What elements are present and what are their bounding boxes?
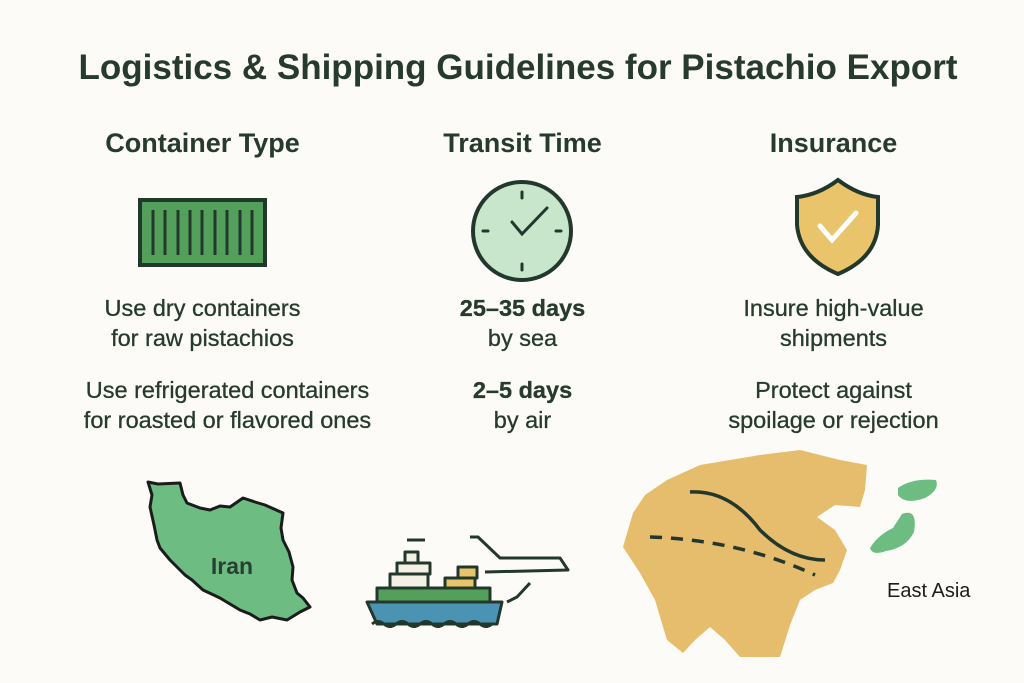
text: dry containers: for raw pistachios [111,325,294,351]
icon: shield [797,180,878,274]
text: sea: by sea [488,325,557,351]
text: spoilage [728,377,939,434]
text: high-value: Insure high-value [743,295,924,321]
heading: transit time: Transit Time [443,128,602,158]
icon: clock [473,182,571,280]
icon: ship and plane [367,537,568,626]
title: Logistics & Shipping Guidelines for Pistachio Export [78,48,957,87]
text: sea [460,295,585,352]
map: Iran: Iran [211,553,253,579]
map: East Asia with routes [623,450,971,657]
text: high-value [743,295,924,352]
map: Iran [148,482,310,620]
map: East Asia with routes: East Asia [887,580,971,602]
heading: insurance: Insurance [770,128,897,158]
heading: container type: Container Type [105,128,300,158]
text: spoilage: Protect against [755,377,912,403]
text: dry containers [105,295,300,352]
text: dry containers: Use dry containers [105,295,300,321]
text: refrigerated containers [84,377,371,433]
panel: insurance [728,128,939,434]
icon: container [140,200,265,265]
text: high-value: shipments [780,325,887,351]
panel: container type [84,128,371,433]
text: refrigerated containers: for roasted or flavored ones [84,407,371,433]
text: spoilage: spoilage or rejection [728,407,939,433]
text: sea: 25–35 days [460,295,585,321]
panel: transit time [443,128,602,434]
text: air: 2–5 days [473,377,572,403]
text: air [473,377,572,434]
text: air: by air [494,407,551,433]
text: refrigerated containers: Use refrigerated containers [86,377,369,403]
